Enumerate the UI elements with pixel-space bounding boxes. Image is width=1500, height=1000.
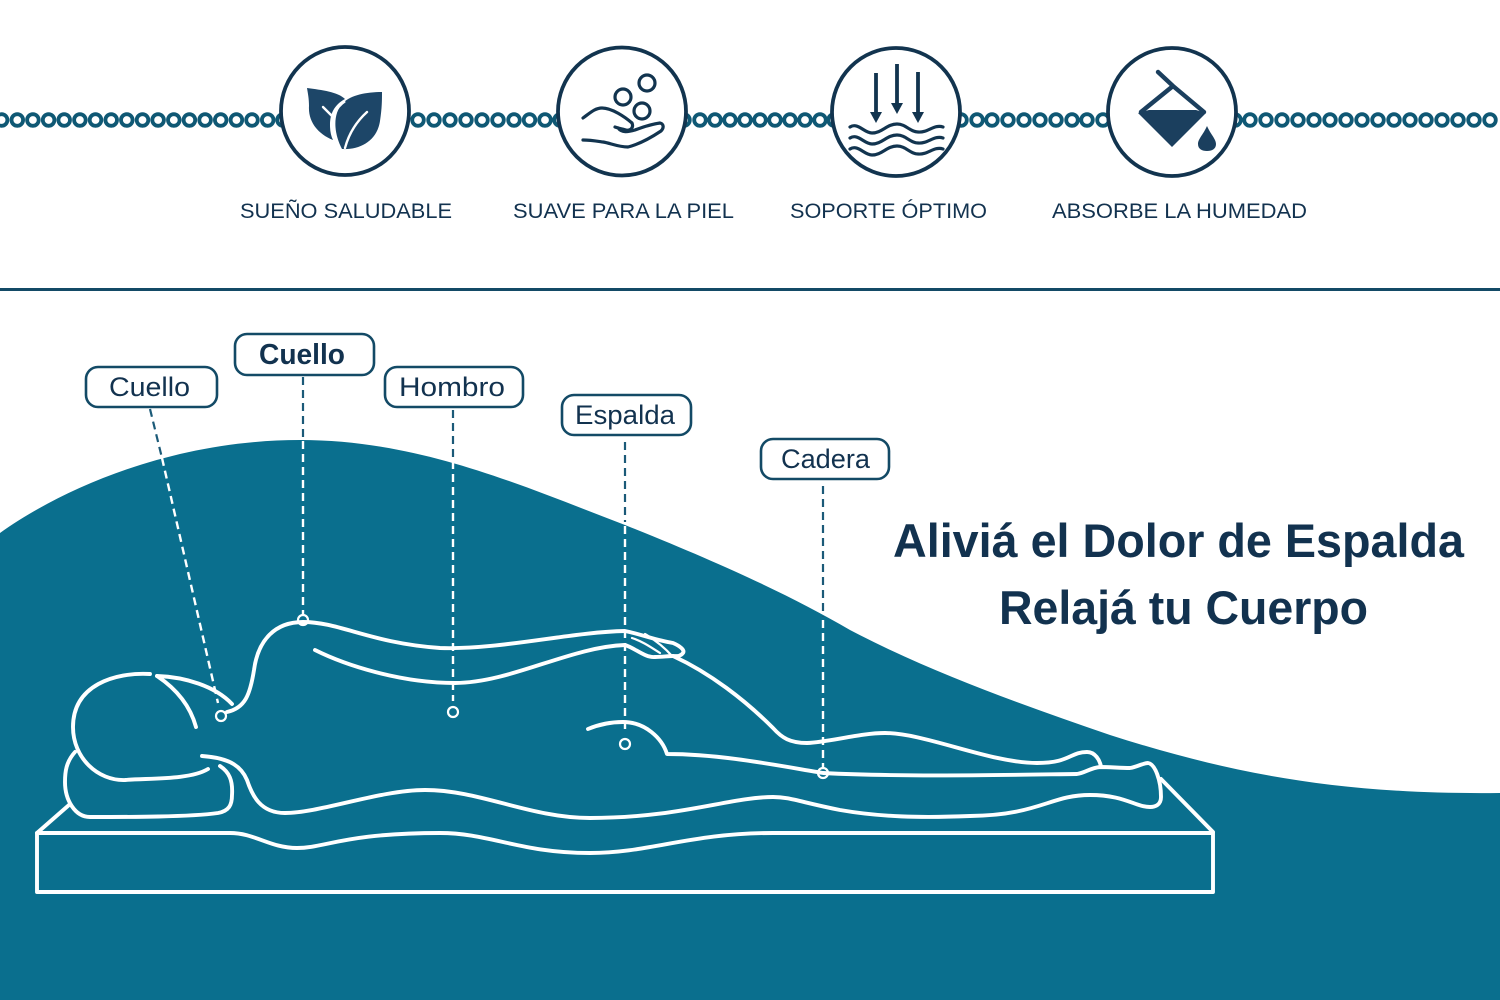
icon: leaves bbox=[281, 47, 409, 175]
feature label: absorbe la humedad: ABSORBE LA HUMEDAD bbox=[1052, 200, 1307, 223]
callout: cuello izquierdo bbox=[86, 367, 226, 721]
callout: cuello central bbox=[235, 334, 374, 625]
body outline bbox=[73, 622, 1161, 818]
mattress bbox=[37, 779, 1213, 892]
callout: cadera: Cadera bbox=[781, 444, 871, 474]
icon: arrows over waves bbox=[832, 48, 960, 176]
feature label: suave para la piel: SUAVE PARA LA PIEL bbox=[513, 200, 734, 223]
icon: tilted bucket with drop bbox=[1108, 48, 1236, 176]
callout: hombro: Hombro bbox=[399, 372, 505, 402]
title: Aliviá el Dolor de Espalda bbox=[893, 514, 1465, 567]
feature label: soporte óptimo: SOPORTE ÓPTIMO bbox=[790, 200, 987, 223]
callout: cuello izquierdo: Cuello bbox=[109, 372, 190, 402]
chain divider bbox=[0, 114, 1496, 126]
section divider line bbox=[0, 288, 1500, 291]
title bbox=[893, 514, 1465, 634]
callout: espalda bbox=[562, 395, 691, 749]
callout: cadera bbox=[761, 439, 889, 778]
title: Relajá tu Cuerpo bbox=[999, 581, 1368, 634]
icon: hand with particles bbox=[558, 48, 686, 176]
background wave bbox=[0, 440, 1500, 1000]
callout: espalda: Espalda bbox=[575, 400, 676, 430]
feature label: sueño saludable: SUEÑO SALUDABLE bbox=[240, 199, 452, 223]
callout: hombro bbox=[385, 367, 523, 717]
callout: cuello central: Cuello bbox=[259, 339, 345, 371]
pillow bbox=[65, 752, 232, 817]
